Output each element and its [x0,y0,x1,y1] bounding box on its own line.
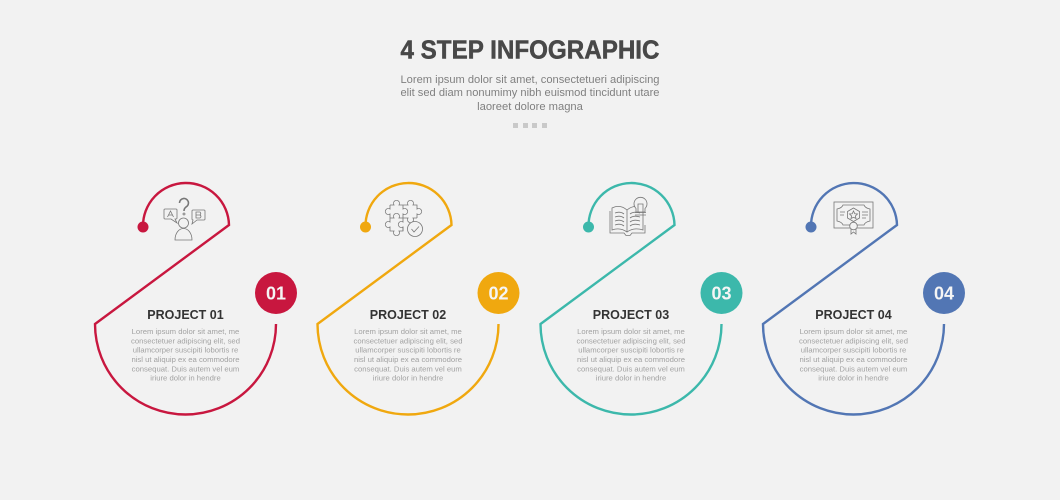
body text: Lorem ipsum dolor sit amet, me [800,327,907,336]
number badge: 01 [266,284,286,304]
start dot [806,222,816,232]
title dots [513,123,547,128]
start dot [583,222,594,232]
subtitle text: elit sed diam nonumimy nibh euismod tincidunt utare [400,87,660,99]
body text [577,327,685,383]
body text: iriure dolor in hendre [818,374,889,383]
body text: nisl ut aliquip ex ea commodore [131,355,240,364]
body text: consequat. Duis autem vel eum [132,364,239,373]
body text: nisl ut aliquip ex ea commodore [799,355,908,364]
body text [799,327,908,383]
body text: consectetuer adipiscing elit, sed [354,336,462,345]
outline path [540,183,722,414]
number badge [700,272,742,314]
subtitle text [400,74,660,113]
body text: Lorem ipsum dolor sit amet, me [354,327,462,336]
panel: project 02 [318,183,520,414]
panel: project 03 [540,183,742,414]
number badge: 03 [711,284,732,304]
body text: consectetuer adipiscing elit, sed [577,336,685,345]
body text: consectetuer adipiscing elit, sed [799,336,908,345]
panel: project 01 [95,183,297,414]
body text: iriure dolor in hendre [596,374,666,383]
number badge: 04 [934,284,954,304]
body text: Lorem ipsum dolor sit amet, me [132,327,239,336]
body text [354,327,462,383]
outline path [763,183,944,414]
body text: ullamcorper suscipiti lobortis re [578,346,684,355]
outline path [318,183,498,414]
body text: consequat. Duis autem vel eum [577,364,685,373]
panel: project 04 [763,183,965,414]
number badge: 02 [488,284,509,304]
body text: iriure dolor in hendre [373,374,443,383]
start dot [360,222,371,232]
body text: ullamcorper suscipiti lobortis re [355,346,461,355]
icon: person with question [164,198,205,240]
heading: PROJECT 03 [593,308,669,322]
body text: consectetuer adipiscing elit, sed [131,336,240,345]
body text: consequat. Duis autem vel eum [800,364,907,373]
body text: ullamcorper suscipiti lobortis re [133,346,238,355]
start dot [138,222,148,232]
body text: iriure dolor in hendre [150,374,221,383]
body text: consequat. Duis autem vel eum [354,364,462,373]
icon: certificate [834,202,873,234]
body text: nisl ut aliquip ex ea commodore [577,355,685,364]
body text: Lorem ipsum dolor sit amet, me [577,327,685,336]
icon: puzzle with check [385,200,422,236]
heading: PROJECT 04 [815,308,892,322]
title: 4 STEP INFOGRAPHIC [400,34,660,64]
icon: book with light bulb [610,197,647,236]
number badge [923,272,965,314]
outline path [95,183,276,414]
number badge [478,272,520,314]
heading: PROJECT 02 [370,308,446,322]
heading: PROJECT 01 [147,308,224,322]
subtitle text: Lorem ipsum dolor sit amet, consectetueri adipiscing [400,74,660,86]
body text [131,327,240,383]
body text: ullamcorper suscipiti lobortis re [801,346,906,355]
number badge [255,272,297,314]
body text: nisl ut aliquip ex ea commodore [354,355,462,364]
subtitle text: laoreet dolore magna [477,101,584,113]
